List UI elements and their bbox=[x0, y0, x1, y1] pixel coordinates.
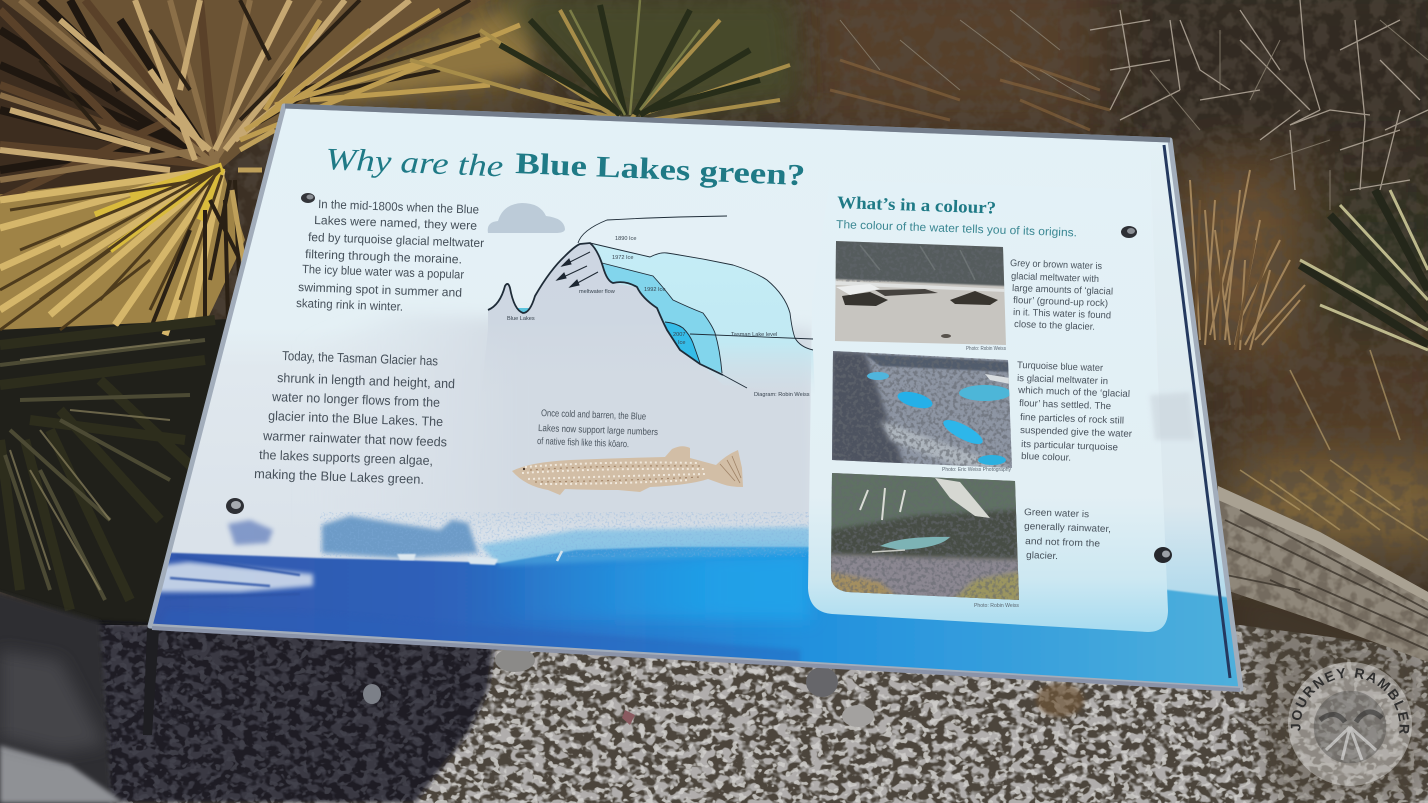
caption: native fish: Lakes now support large numbers bbox=[538, 423, 658, 438]
diagram labels: 2007 bbox=[673, 332, 685, 338]
diagram labels: Tasman Lake level bbox=[731, 332, 777, 338]
Blue Lakes water bbox=[516, 308, 529, 313]
diagram labels bbox=[507, 236, 810, 398]
tussock colour masses bbox=[0, 0, 500, 168]
title: Why are the bbox=[325, 141, 504, 183]
title bbox=[325, 141, 806, 192]
text: green water bbox=[1024, 507, 1111, 562]
blue painted water band bbox=[140, 512, 1250, 695]
shadow on gravel bbox=[60, 620, 495, 803]
photo credits: Photo: Robin Weiss bbox=[974, 603, 1019, 609]
white brush strokes at left bbox=[150, 562, 313, 592]
text block: when the lakes were named bbox=[296, 197, 484, 314]
mountain bbox=[480, 243, 747, 405]
colour panel bbox=[808, 180, 1168, 632]
text block: when the lakes were named: filtering through the moraine. bbox=[305, 247, 462, 266]
photo credits: Photo: Robin Weiss bbox=[966, 346, 1006, 352]
1992 ice bbox=[602, 263, 722, 373]
text: grey or brown water: close to the glacier. bbox=[1014, 319, 1095, 333]
text block: the Tasman Glacier today bbox=[254, 348, 455, 487]
text block: when the lakes were named: swimming spot in summer and bbox=[298, 280, 462, 300]
reeds beside sign bbox=[1190, 170, 1305, 350]
icon: cloud bbox=[488, 203, 565, 233]
subheading: The colour of the water tells you of its origins. bbox=[836, 219, 1077, 239]
text block: the Tasman Glacier today: Today, the Tasman Glacier has bbox=[282, 348, 439, 368]
text: green water: Green water is bbox=[1024, 507, 1089, 520]
text: grey or brown water: glacial meltwater with bbox=[1011, 271, 1099, 285]
text: grey or brown water: in it. This water is found bbox=[1013, 307, 1111, 321]
text: turquoise blue water: suspended give the water bbox=[1020, 425, 1133, 440]
text: turquoise blue water: blue colour. bbox=[1021, 451, 1071, 464]
text: grey or brown water bbox=[1010, 258, 1113, 333]
text: turquoise blue water bbox=[1017, 360, 1133, 464]
watermark: Journey Rambler: JOURNEY RAMBLER bbox=[1290, 668, 1410, 734]
text: grey or brown water: Grey or brown water is bbox=[1010, 258, 1102, 272]
1972 ice bbox=[590, 243, 815, 395]
diagram labels: 1992 Ice bbox=[644, 287, 665, 293]
text block: the Tasman Glacier today: the lakes supports green algae, bbox=[259, 447, 433, 468]
ice lines and ground line bbox=[488, 216, 813, 388]
text block: when the lakes were named: fed by turquoise glacial meltwater bbox=[308, 230, 484, 250]
illustration: kōaro fish bbox=[512, 446, 743, 495]
text block: when the lakes were named: In the mid-1800s when the Blue bbox=[318, 197, 480, 217]
text block: the Tasman Glacier today: glacier into the Blue Lakes. The bbox=[268, 408, 443, 429]
text block: the Tasman Glacier today: shrunk in length and height, and bbox=[277, 370, 455, 391]
diagram labels: 1890 Ice bbox=[615, 236, 636, 242]
glacier cross-section diagram bbox=[480, 216, 815, 405]
dry twigs bbox=[1090, 0, 1428, 190]
heading: what's in a colour: What’s in a colour? bbox=[837, 192, 996, 218]
2007 ice bbox=[665, 322, 700, 363]
title: Blue Lakes green? bbox=[515, 147, 806, 192]
text block: the Tasman Glacier today: warmer rainwater that now feeds bbox=[262, 428, 448, 449]
grey wash behind diagram bbox=[400, 316, 812, 520]
right-hand pale strip bbox=[1164, 524, 1226, 598]
watermark: Journey Rambler bbox=[1288, 662, 1412, 786]
text block: the Tasman Glacier today: water no longer flows from the bbox=[271, 389, 440, 410]
photo: green rainwater lake bbox=[828, 470, 1023, 605]
mounting screws bbox=[226, 193, 1172, 563]
photo: turquoise meltwater bbox=[830, 348, 1014, 472]
text: turquoise blue water: fine particles of rock still bbox=[1020, 412, 1124, 427]
text: grey or brown water: flour’ (ground-up rock) bbox=[1013, 295, 1108, 309]
text: turquoise blue water: its particular turquoise bbox=[1021, 439, 1118, 453]
caption: native fish: Once cold and barren, the Blue bbox=[541, 408, 646, 423]
metal frame bbox=[150, 106, 1241, 689]
photo credits bbox=[942, 346, 1019, 609]
text: turquoise blue water: Turquoise blue water bbox=[1017, 360, 1104, 374]
caption: native fish bbox=[537, 408, 658, 450]
background: tussock blades bbox=[0, 0, 1428, 610]
text block: the Tasman Glacier today: making the Blue Lakes green. bbox=[254, 466, 424, 487]
background: gravel ground bbox=[0, 590, 1428, 803]
photo credits: Photo: Eric Weiss Photography bbox=[942, 467, 1011, 473]
text: turquoise blue water: is glacial meltwater in bbox=[1017, 373, 1108, 387]
text: green water: generally rainwater, bbox=[1024, 521, 1111, 535]
caption: native fish: of native fish like this kōaro. bbox=[537, 436, 629, 450]
text: turquoise blue water: which much of the ‘glacial bbox=[1017, 385, 1130, 400]
text block: when the lakes were named: Lakes were named, they were bbox=[314, 213, 478, 233]
text block: when the lakes were named: The icy blue water was a popular bbox=[302, 262, 464, 282]
diagram labels: 1972 Ice bbox=[612, 255, 633, 261]
meltwater arrows bbox=[557, 252, 598, 287]
text: turquoise blue water: flour’ has settled. The bbox=[1019, 398, 1111, 412]
text: green water: glacier. bbox=[1026, 550, 1058, 562]
text: grey or brown water: large amounts of ‘glacial bbox=[1012, 283, 1113, 298]
diagram labels: Diagram: Robin Weiss bbox=[754, 392, 810, 398]
flax bbox=[1300, 190, 1428, 345]
diagram labels: Ice bbox=[678, 340, 685, 346]
text block: when the lakes were named: skating rink in winter. bbox=[296, 296, 403, 314]
diagram labels: meltwater flow bbox=[579, 289, 616, 295]
speckled patches bbox=[228, 520, 273, 545]
sign post bbox=[143, 628, 159, 735]
log beside the sign bbox=[1218, 486, 1428, 662]
photo: grey glacial meltwater bbox=[835, 241, 1006, 345]
sign panel bbox=[140, 106, 1250, 700]
text: green water: and not from the bbox=[1025, 536, 1100, 550]
diagram labels: Blue Lakes bbox=[507, 316, 535, 322]
